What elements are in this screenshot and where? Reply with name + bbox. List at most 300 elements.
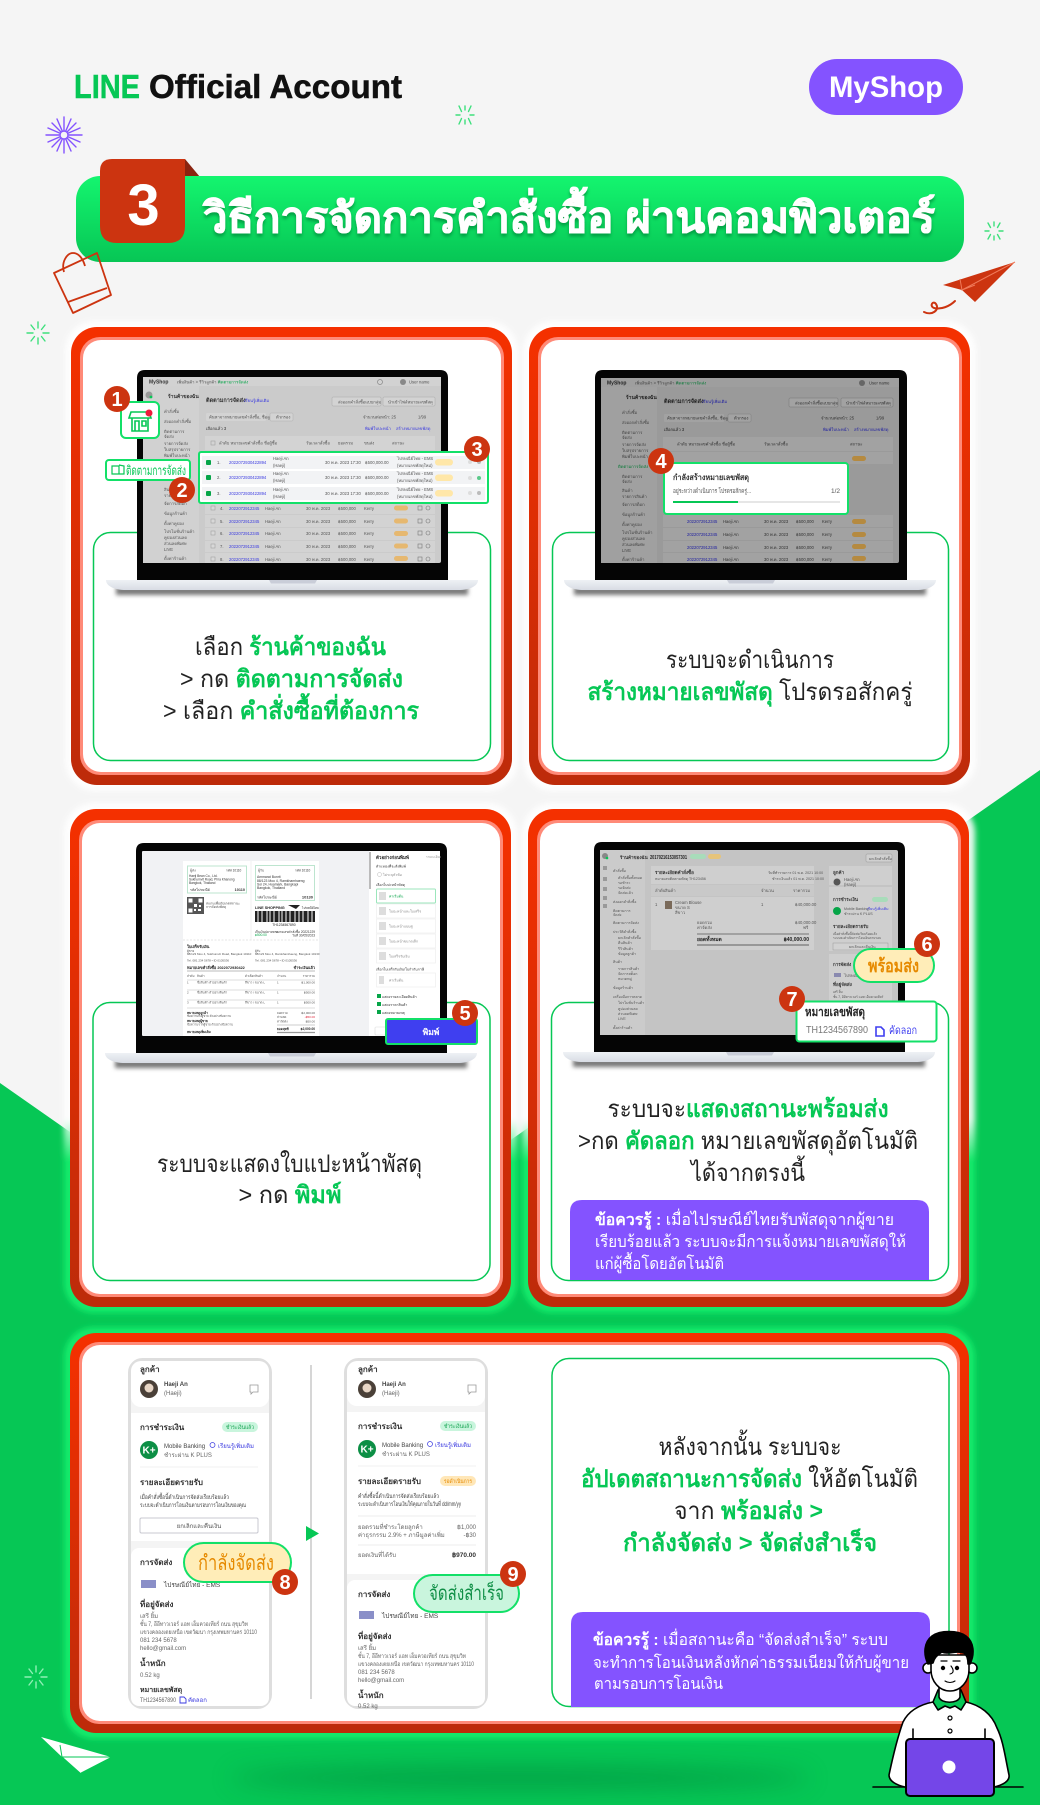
laptop with shipping label preview: หมายเลขคำสั่งซื้อ 2022072930422 [187, 964, 245, 970]
laptop with dashboard: ยอดรวม [338, 440, 353, 446]
callout: selected orders: 1. [217, 460, 220, 465]
laptop with dimmed dashboard: คูปองส่วนลด [622, 536, 645, 542]
modal: creating tracking number: อยู่ระหว่างดำเนินการ โปรดรอสักครู่... [673, 487, 751, 495]
dimmed table rows: 30 พ.ค. 2023 [764, 557, 789, 562]
laptop with dimmed dashboard: ค้นหาจากหมายเลขคำสั่งซื้อ, ชื่อลูกค้า [667, 414, 735, 422]
callout: selected orders: ฿500,000.00 [365, 475, 389, 480]
phone screen: shipping in progress: ยกเลิกและคืนเงิน [177, 1522, 221, 1530]
text: step 4 instructions [588, 647, 913, 708]
laptop with shipping label preview: เก็บเงินปลายทาง [255, 928, 278, 934]
callout: selected orders: 30 พ.ค. 2023 17:30 [325, 475, 362, 480]
phone screen: shipping in progress: น้ำหนัก [140, 1657, 166, 1668]
callout: selected orders: ไปรษณีย์ไทย - EMS [396, 470, 433, 476]
phone screen: delivered: คำสั่งซื้อนี้ดำเนินการจัดส่งเรียบร้อยแล้ว [358, 1490, 439, 1500]
laptop with dashboard: สร้างหมายเลขพัสดุ [396, 426, 431, 432]
laptop with shipping label preview: Haeji Bean Co., Ltd. [189, 874, 218, 878]
laptop with shipping label preview: หมายเลขคำสั่งซื้อ 20221229 [275, 929, 315, 934]
laptop with shipping label preview: TH1234567890 [272, 923, 296, 927]
note: payout tip [571, 1612, 930, 1707]
laptop with dimmed dashboard: User name [869, 380, 890, 386]
table rows: ฿500,000 [338, 519, 356, 524]
table rows: ฿500,000 [338, 544, 356, 549]
callout: tracking number: หมายเลขพัสดุ [805, 1005, 865, 1020]
print settings sidebar: เลือกใบเสร็จรับเงิน/ใบกำกับภาษี [376, 966, 425, 972]
laptop with dashboard: MyShop [149, 380, 168, 386]
callout: print button: พิมพ์ [423, 1027, 440, 1037]
phone screen: delivered: ยอดเงินที่ได้รับ [358, 1551, 396, 1559]
laptop with dimmed dashboard: ส่งออกคำสั่งซื้อ [622, 419, 650, 425]
phone screen: delivered: ลูกค้า [358, 1364, 378, 1375]
dimmed table rows [663, 452, 893, 563]
panel: step 4 [523, 321, 976, 791]
phone screen: delivered: ระบบจะดำเนินการโอนเงินให้คุณภายในวันที่ dd/mm/yy [358, 1500, 461, 1508]
laptop with shipping label preview: สีขาว / ขนาด L [245, 1000, 265, 1004]
laptop with dimmed dashboard: วันเวลาสั่งซื้อ [764, 440, 788, 446]
laptop with dashboard: ติดตามการ [164, 429, 185, 434]
table rows [205, 502, 435, 563]
laptop with dashboard: คำสั่งซื้อ [164, 408, 180, 414]
phone screen: shipping in progress: รายละเอียดรายรับ [140, 1477, 203, 1487]
note: shipping tip: ข้อควรรู้ : เมื่อไปรษณีย์ไทยรับพัสดุจากผู้ขาย [595, 1208, 894, 1231]
laptop with order detail: รอชำระ [618, 881, 630, 885]
laptop with order detail: สินค้า [665, 888, 676, 893]
print settings sidebar: ไม่ระบุหัวข้อ [382, 872, 402, 878]
dimmed table rows: 30 พ.ค. 2023 [764, 545, 789, 550]
table rows: Haeji An [265, 544, 281, 549]
icon: shopping bag [54, 253, 111, 313]
laptop with order detail: จัดส่งแล้ว [618, 890, 633, 895]
laptop with dimmed dashboard: ลำดับ หมายเลขคำสั่งซื้อ [677, 440, 721, 446]
laptop with order detail: ข้อมูลลูกค้า [618, 951, 636, 956]
phone screen: delivered: น้ำหนัก [358, 1689, 384, 1700]
laptop with dimmed dashboard: ตั้งค่าคูปอง [622, 521, 642, 528]
laptop with dimmed dashboard: ติดตามการจัดส่ง [676, 380, 706, 386]
dimmed table rows: 30 พ.ค. 2023 [764, 519, 789, 524]
callout: selected orders: 2022072930422894 [229, 460, 267, 465]
phone screen: delivered: ค่าธุรกรรม 2.9% + ภาษีมูลค่าเพิ่ม [358, 1531, 445, 1539]
table rows: 30 พ.ค. 2023 [306, 544, 331, 549]
phone screen: delivered: 0.52 kg [358, 1704, 378, 1710]
laptop with dashboard: เพิ่มสินค้า > รีวิวลูกค้า > [177, 378, 221, 386]
callout: shop icon [121, 402, 159, 438]
table rows: 7. [220, 544, 224, 549]
barcode [255, 911, 315, 922]
phone screen: shipping in progress: ชำระผ่าน K PLUS [164, 1452, 212, 1459]
text: step 1 to 3 instructions: เลือก ร้านค้าของฉัน [195, 634, 387, 661]
badge: MyShop: MyShop [829, 71, 943, 104]
laptop with dashboard: ตั้งค่าคูปอง [164, 520, 184, 527]
laptop with order detail: คูปองส่วนลด [618, 1007, 638, 1011]
step badge 2: 2 [176, 480, 188, 502]
text box: status updates: กำลังจัดส่ง > จัดส่งสำเร็จ [623, 1528, 877, 1557]
laptop with dimmed dashboard [564, 370, 936, 595]
phone screen: delivered: ฿970.00 [452, 1551, 476, 1559]
laptop with dimmed dashboard: ใบสรุปรายการ [622, 447, 649, 454]
callout: selected orders: Haeji An [273, 487, 289, 492]
laptop with dashboard: วันเวลาสั่งซื้อ [306, 440, 330, 446]
callout: selected orders: Haeji An [273, 456, 289, 461]
phone screen: shipping in progress: K+ [142, 1446, 156, 1456]
laptop with shipping label preview [105, 843, 477, 1068]
laptop with order detail: รอจัดส่ง [618, 886, 631, 890]
laptop with shipping label preview: สินค้า [197, 974, 205, 978]
table rows: 5. [220, 519, 224, 524]
dimmed table rows: ฿500,000 [796, 545, 814, 550]
laptop with dimmed dashboard: คำสั่งซื้อ [622, 409, 638, 415]
dimmed table rows: Haeji An [723, 532, 739, 537]
laptop with shipping label preview: 1 [277, 990, 279, 994]
step badge 1 [104, 386, 130, 412]
status pill: shipping [184, 1543, 291, 1582]
icon: green burst right [985, 222, 1003, 240]
laptop with shipping label preview: Bangkok, Thailand [189, 881, 216, 885]
laptop with shipping label preview: ฿50.00 [306, 1020, 315, 1024]
laptop with order detail: เมื่อคำสั่งซื้อนี้จัดส่งเรียบร้อยแล้ว [833, 931, 877, 936]
step badge 9 [500, 1561, 526, 1587]
laptop with order detail: ชำระผ่าน K PLUS [844, 912, 873, 916]
table rows: 2022072912345 [229, 544, 260, 549]
laptop with order detail: หมายเลขติดตามพัสดุ TH123456 [655, 877, 706, 882]
phone screen: shipping in progress: เรียนรู้เพิ่มเติม [218, 1442, 254, 1450]
dimmed table rows: ฿500,000 [796, 519, 814, 524]
panel: step 6 and 7 [522, 803, 975, 1313]
laptop with order detail: ยกเลิกคำสั่งซื้อ [618, 935, 641, 940]
note: payout tip: จะทำการโอนเงินหลังหักค่าธรรมเนียมให้กับผู้ขาย [593, 1653, 909, 1673]
laptop with order detail: ประวัติคำสั่งซื้อ [613, 929, 636, 934]
laptop with order detail: เสรี ยิ้ม [833, 989, 843, 994]
laptop with dimmed dashboard: ตัวกรอง [734, 416, 748, 420]
phone screen: delivered: Mobile Banking [382, 1443, 423, 1449]
callout: selected orders: ไปรษณีย์ไทย - EMS [396, 455, 433, 461]
laptop with shipping label preview: รหัสไปรษณีย์ [190, 887, 210, 892]
laptop with shipping label preview: การจัดส่งพัสดุ [206, 905, 226, 910]
icon: green burst left [27, 322, 49, 344]
laptop with dashboard: จัดส่ง [164, 434, 174, 439]
text: step 6 and 7 instructions: >กด คัดลอก หมายเลขพัสดุอัตโนมัติ [578, 1127, 918, 1156]
text: step 5 instructions: > กด พิมพ์ [238, 1181, 342, 1209]
laptop with dashboard [106, 370, 478, 595]
step badge 8: 8 [279, 1572, 291, 1594]
laptop with dimmed dashboard: ติดตามการจัดส่ง [618, 464, 648, 469]
laptop with dashboard: เรียนรู้เพิ่มเติม [244, 397, 269, 404]
laptop with shipping label preview: ใบเสร็จรับเงิน [187, 943, 210, 949]
laptop with order detail: สินค้า [613, 959, 622, 964]
phone screen: delivered: (Haeji) [382, 1391, 400, 1397]
phone screen: delivered: ชำระผ่าน K PLUS [382, 1451, 430, 1458]
phone screen: shipping in progress: แขวงคลองเตยเหนือ เขตวัฒนา กรุงเทพมหานคร 10110 [140, 1628, 258, 1636]
table rows: ฿500,000 [338, 557, 356, 562]
icon: purple sparkle [46, 117, 82, 153]
badge: MyShop [809, 59, 963, 115]
laptop with order detail: รายการสินค้า [618, 966, 639, 971]
print settings sidebar: ใบปะหน้าและใบเสร็จ [389, 908, 421, 914]
dimmed table rows: Haeji An [723, 557, 739, 562]
laptop with shipping label preview: Ammarat Bunrit [257, 875, 281, 879]
text box: status updates [552, 1358, 949, 1706]
callout: selected orders: ไปรษณีย์ไทย - EMS [396, 486, 433, 492]
laptop with shipping label preview: รหัส 10110 [226, 868, 241, 872]
phone screen: shipping in progress: ลูกค้า [140, 1364, 160, 1375]
laptop with shipping label preview: Tel. 081 234 5678 • ID 0105536 [187, 958, 229, 962]
print settings sidebar: แสดงราคาสินค้า [382, 1003, 407, 1007]
table rows: Kerry [364, 519, 375, 524]
table rows: Haeji An [265, 531, 281, 536]
status pill: delivered [414, 1575, 519, 1612]
callout: tracking menu: ติดตามการจัดส่ง [126, 463, 186, 478]
laptop with order detail: ร้านค้าของฉัน [620, 854, 649, 860]
phone screen: delivered: เรียนรู้เพิ่มเติม [435, 1441, 471, 1449]
phone screen: shipping in progress: หมายเลขพัสดุ [140, 1686, 183, 1694]
table rows: 6. [220, 531, 224, 536]
text: step 1 to 3 instructions: > กด ติดตามการจัดส่ง [180, 666, 403, 693]
laptop with dashboard: ร้านค้าของฉัน [168, 393, 199, 400]
laptop with shipping label preview: 10130 [302, 894, 314, 900]
callout: selected orders: (หมายเลขพัสดุใหม่) [397, 477, 433, 484]
callout: selected orders: (Haeji) [273, 494, 286, 499]
modal: creating tracking number: 1/2 [831, 488, 840, 495]
text: step 6 and 7 instructions [578, 1096, 918, 1187]
laptop with dashboard: ชื่อผู้ซื้อ [264, 440, 278, 446]
laptop with dashboard: 1/99 [418, 414, 427, 420]
laptop with shipping label preview: ผู้ส่ง [190, 868, 196, 872]
laptop with shipping label preview: ชำระเงินแล้ว [294, 964, 315, 970]
laptop with shipping label preview: ชื่อสินค้า ตัวอย่างสินค้า [197, 990, 227, 994]
laptop with dimmed dashboard: จัดการสต็อก [622, 501, 645, 507]
print settings sidebar: ใบปะหน้าขนาดเล็ก [389, 938, 418, 944]
laptop with order detail: คำสั่งซื้อทั้งหมด [618, 875, 643, 880]
text: step 1 to 3 instructions [163, 634, 419, 725]
laptop with shipping label preview: หมายเหตุผู้ขาย [187, 1018, 208, 1024]
laptop with dimmed dashboard: สร้างหมายเลขพัสดุ [854, 427, 889, 433]
phone screen: shipping in progress: เสรี ยิ้ม [140, 1610, 158, 1620]
panel: step 8 and 9 [64, 1327, 975, 1739]
laptop with order detail: ไปรษณีย์ไทย [843, 972, 868, 978]
laptop with shipping label preview: ฿2,000.00 [301, 1011, 315, 1015]
laptop with shipping label preview: ผู้รับ [255, 949, 260, 953]
print settings sidebar: ตัวอย่างก่อนพิมพ์ [376, 854, 409, 860]
laptop with dimmed dashboard: ติดตามการ [622, 430, 643, 435]
laptop with shipping label preview: Tel. 081 234 5678 • ID 0105536 [255, 958, 297, 962]
phone screen: delivered: Haeji An [382, 1382, 406, 1388]
phone screen: shipping in progress: 081 234 5678 [140, 1638, 177, 1644]
phone screen: delivered: ฿1,000 [457, 1524, 477, 1531]
text: step 5 instructions: ระบบจะแสดงใบแปะหน้าพัสดุ [157, 1150, 422, 1179]
print settings sidebar: เลือกใบปะหน้าพัสดุ [376, 882, 405, 888]
print settings sidebar: ใบเสร็จรับเงิน [389, 952, 410, 958]
print settings sidebar: ตำแหน่งที่จะสั่งพิมพ์ [376, 864, 407, 868]
laptop with dimmed dashboard: ส่งออกคำสั่งซื้อแบบกลุ่ม [795, 400, 838, 406]
laptop with order detail: จัดส่ง [613, 913, 622, 917]
step badge 5: 5 [459, 1003, 471, 1025]
laptop with dimmed dashboard: จำนวนต่อหน้า: 25 [821, 416, 855, 420]
laptop with shipping label preview: ลำดับ [187, 974, 194, 978]
callout: tracking number: คัดลอก [889, 1025, 917, 1037]
laptop with dashboard: ส่งออกคำสั่งซื้อ [164, 418, 192, 424]
table rows: 2022072912345 [229, 506, 260, 511]
callout: selected orders [199, 452, 488, 503]
laptop with shipping label preview: 88/123 Moo 4, Sukhumvit Road, Bangkok 10110 [187, 952, 252, 956]
note: shipping tip: เรียบร้อยแล้ว ระบบจะมีการแจ้งหมายเลขพัสดุให้ [595, 1232, 906, 1252]
dimmed table rows: 2022072912345 [687, 545, 718, 550]
icon: green burst bottom left [25, 1666, 47, 1688]
status pill: delivered: จัดส่งสำเร็จ [429, 1580, 504, 1605]
print settings sidebar: แสดงรายละเอียดสินค้า [382, 994, 417, 999]
phone screen: delivered: K+ [360, 1444, 374, 1456]
callout: selected orders: (Haeji) [273, 478, 286, 483]
note: payout tip: ตามรอบการโอนเงิน [594, 1674, 723, 1693]
table rows: ฿500,000 [338, 531, 356, 536]
laptop with shipping label preview: ตัวเลือกสินค้า [245, 973, 263, 978]
dimmed table rows: Kerry [822, 557, 833, 562]
laptop with order detail: ค่าจัดส่ง [697, 925, 712, 930]
text box: status updates: จาก พร้อมส่ง > [674, 1498, 823, 1525]
laptop with order detail: การชำระเงิน [833, 896, 859, 902]
laptop with shipping label preview: ค่าจัดส่ง [277, 1020, 288, 1024]
laptop with dimmed dashboard: ชื่อผู้ซื้อ [722, 440, 736, 448]
laptop with shipping label preview: ข้อความถึงผู้ขาย ตัวอย่างข้อความ [187, 1014, 231, 1018]
laptop with shipping label preview: ยอดรวม [277, 1011, 288, 1015]
phone screen: shipping in progress: ชำระเงินแล้ว [226, 1424, 254, 1431]
logo: LINE Official Account: Official Account [149, 68, 402, 105]
laptop with dimmed dashboard: นำเข้าไฟล์หมายเลขพัสดุ [846, 400, 891, 406]
laptop with order detail: ตั้งค่าร้านค้า [613, 1025, 632, 1030]
laptop with dashboard: พิมพ์ใบปะหน้า [365, 425, 391, 431]
callout: tracking menu [106, 460, 190, 480]
laptop with dashboard: ตัวกรอง [276, 414, 290, 420]
laptop with shipping label preview: สแกนเพื่ออัปเดตสถานะ [206, 900, 240, 906]
laptop with dashboard: ติดตามการจัดส่ง [206, 397, 246, 404]
laptop with dashboard: จัดการสต็อก [164, 500, 187, 506]
laptop with dimmed dashboard: สินค้า [622, 488, 633, 493]
icon: green burst top [456, 106, 474, 124]
phone screen: delivered: -฿30 [464, 1532, 477, 1539]
laptop with dimmed dashboard: โปรโมชั่นร้านค้า [622, 529, 652, 535]
step badge 4 [648, 448, 674, 474]
phone screen: shipping in progress: TH1234567890 [140, 1698, 177, 1704]
banner heading: วิธีการจัดการคำสั่งซื้อ ผ่านคอมพิวเตอร์ [202, 186, 935, 241]
laptop with order detail: การจัดส่ง [833, 962, 851, 967]
laptop with dashboard: ติดตามการจัดส่ง [218, 380, 248, 384]
laptop with shipping label preview: ฿2,000.00 [301, 1027, 315, 1031]
table rows: Kerry [364, 531, 375, 536]
step badge 6: 6 [921, 934, 933, 956]
text box: status updates: หลังจากนั้น ระบบจะ [658, 1429, 842, 1461]
divider and arrow [306, 1365, 319, 1699]
step badge 8 [272, 1569, 298, 1595]
laptop with order detail: ชั้น 7, อีอีทาวเวอร์ แอท เอ็มควอเทียร์ [833, 993, 884, 999]
table rows: ฿500,000 [338, 506, 356, 511]
laptop with shipping label preview: ราคารวม [303, 974, 315, 978]
laptop with dashboard: ใบสรุปรายการ [164, 446, 191, 453]
laptop with order detail: ยอดทั้งหมด [697, 934, 722, 943]
phone screen: shipping in progress: ระบบจะดำเนินการโอนเงินตามรอบการโอนเงินของคุณ [140, 1501, 246, 1509]
modal: creating tracking number [664, 463, 848, 514]
laptop with dashboard: ขนส่ง [364, 440, 374, 446]
laptop with shipping label preview: หมายเหตุเพิ่มเติม [187, 1029, 211, 1035]
phone screen: shipping in progress [130, 1360, 270, 1708]
laptop with order detail: ฟรี [803, 925, 809, 930]
laptop with shipping label preview: ผู้รับ [258, 868, 264, 872]
laptop with shipping label preview: LINE SHOPPING [255, 906, 285, 910]
laptop with shipping label preview: 1 [277, 1000, 279, 1004]
laptop with order detail: สีขาว [675, 910, 686, 915]
laptop with dimmed dashboard: เรียนรู้เพิ่มเติม [702, 398, 727, 405]
phone screen: delivered: การจัดส่ง [358, 1590, 390, 1599]
note: payout tip: ข้อควรรู้ : เมื่อสถานะคือ “จัดส่งสำเร็จ” ระบบ [593, 1628, 888, 1651]
laptop with order detail: LIVE [618, 1017, 626, 1021]
table rows: Haeji An [265, 519, 281, 524]
callout: selected orders: 2022072930422894 [229, 475, 267, 480]
callout: selected orders: 2022072930422894 [229, 491, 267, 496]
table rows: Kerry [364, 544, 375, 549]
table rows: 2022072912345 [229, 531, 260, 536]
laptop with dimmed dashboard: LIVE [622, 548, 631, 553]
table rows: 30 พ.ค. 2023 [306, 557, 331, 562]
laptop with order detail: ส่งออกคำสั่งซื้อ [613, 899, 636, 904]
laptop with dimmed dashboard: ร้านค้าของฉัน [626, 394, 657, 401]
phone screen: delivered: ชั้น 7, อีอีทาวเวอร์ แอท เอ็มควอเทียร์ ถนน สุขุมวิท [358, 1650, 466, 1660]
laptop with order detail: คำสั่งซื้อ [613, 868, 626, 873]
print settings sidebar: ค่าเริ่มต้น [389, 978, 404, 982]
laptop with shipping label preview: รหัส 10110 [295, 868, 310, 872]
phone screen: delivered: แขวงคลองเตยเหนือ เขตวัฒนา กรุงเทพมหานคร 10110 [358, 1660, 475, 1668]
phone screen: delivered [346, 1360, 486, 1710]
laptop with dashboard: LIVE [164, 547, 173, 552]
step badge 7: 7 [786, 989, 798, 1011]
step badge 5 [452, 1000, 478, 1026]
dimmed table rows: ฿500,000 [796, 557, 814, 562]
status pill: ready to ship [854, 949, 934, 982]
table rows: 2022072912345 [229, 557, 260, 562]
phone screen: delivered: ยอดรวมที่ชำระโดยลูกค้า [358, 1523, 423, 1531]
status pill: ready to ship: พร้อมส่ง [868, 956, 919, 976]
callout: selected orders: 3. [217, 491, 220, 496]
laptop with shipping label preview: ไปรษณีย์ไทย [301, 906, 319, 910]
laptop with dashboard: ส่วนลดพิเศษ [164, 541, 187, 546]
phone screen: shipping in progress: คัดลอก [188, 1697, 207, 1704]
phone screen: shipping in progress: การชำระเงิน [140, 1423, 185, 1432]
callout: print button [386, 1019, 477, 1044]
laptop with order detail: เครื่องมือการตลาด [613, 994, 643, 999]
laptop with dimmed dashboard: สถานะ [850, 442, 863, 446]
dimmed table rows: 2022072912345 [687, 519, 718, 524]
phone screen: delivered: ชำระเงินแล้ว [444, 1423, 472, 1430]
laptop with order detail: ยกเลิกคำสั่งซื้อ [869, 856, 892, 861]
laptop with shipping label preview: 1 [277, 980, 279, 984]
laptop with order detail: ส่วนลดพิเศษ [618, 1012, 638, 1016]
dimmed table rows: 30 พ.ค. 2023 [764, 532, 789, 537]
laptop with order detail: ฿40,000.00 [795, 920, 817, 925]
text: step 5 instructions [157, 1150, 422, 1209]
laptop with dimmed dashboard: รายการจัดส่ง [622, 442, 646, 447]
laptop with dimmed dashboard: เพิ่มสินค้า > รีวิวลูกค้า > [635, 380, 679, 386]
laptop with shipping label preview: ฿500.00 [304, 1000, 315, 1004]
modal: creating tracking number: กำลังสร้างหมายเลขพัสดุ [673, 472, 749, 483]
dimmed table rows: 2022072912345 [687, 532, 718, 537]
laptop with order detail: เรียนรู้เพิ่มเติม [867, 906, 889, 911]
callout: selected orders: ฿500,000.00 [365, 460, 389, 465]
phone screen: delivered: เสรี ยิ้ม [358, 1642, 376, 1652]
phone screen: shipping in progress: (Haeji) [164, 1391, 182, 1397]
text: step 1 to 3 instructions: > เลือก คำสั่งซื้อที่ต้องการ [163, 692, 419, 725]
callout: selected orders: (Haeji) [273, 463, 286, 468]
laptop with dimmed dashboard: ส่วนลดพิเศษ [622, 542, 645, 547]
table rows: Kerry [364, 506, 375, 511]
step badge 9: 9 [507, 1564, 519, 1586]
phone screen: delivered: 081 234 5678 [358, 1670, 395, 1676]
panel: step 5 [64, 803, 517, 1313]
laptop with shipping label preview: จำนวน [277, 974, 286, 978]
